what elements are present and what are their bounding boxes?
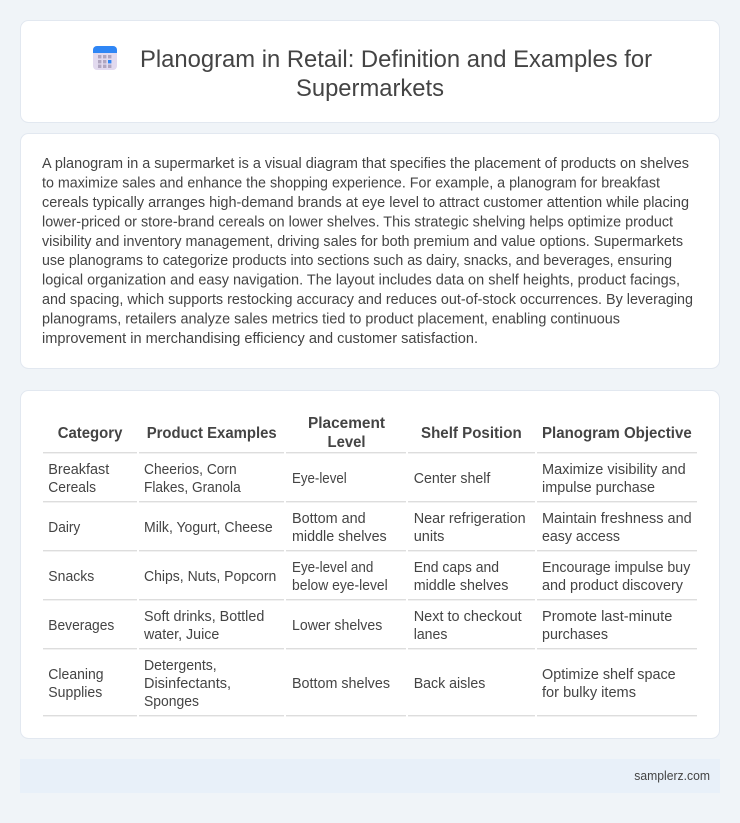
description paragraph: use planograms to categorize products into sections such as dairy, snacks, and beverages, ensuring xyxy=(42,253,672,269)
row: beverages: lanes xyxy=(414,627,447,643)
row: breakfast cereals: Flakes, Granola xyxy=(144,480,242,496)
row: breakfast cereals: impulse purchase xyxy=(542,480,655,496)
row: cleaning supplies xyxy=(48,658,676,710)
row: dairy: middle shelves xyxy=(292,529,387,545)
row: snacks: and product discovery xyxy=(542,578,684,594)
table header row: Level xyxy=(328,434,366,451)
row: snacks: below eye-level xyxy=(292,578,388,594)
table header row: Planogram Objective xyxy=(542,425,692,442)
row: cleaning supplies: Cleaning xyxy=(48,667,104,683)
description paragraph: A planogram in a supermarket is a visual diagram that specifies the placement of products on shelves xyxy=(42,156,689,172)
row: cleaning supplies: Sponges xyxy=(144,694,199,710)
row: dairy: Milk, Yogurt, Cheese xyxy=(144,520,273,536)
row: snacks: Snacks xyxy=(48,569,94,585)
row: beverages: Soft drinks, Bottled xyxy=(144,609,264,625)
row: cleaning supplies: Back aisles xyxy=(414,676,485,692)
row: beverages: purchases xyxy=(542,627,608,643)
row: beverages: water, Juice xyxy=(143,627,219,643)
description paragraph: cereals typically arranges high-demand brands at eye level to attract customer attention while placing xyxy=(42,195,689,211)
table header row: Shelf Position xyxy=(421,425,522,442)
row: snacks: middle shelves xyxy=(414,578,508,594)
panel: description xyxy=(20,134,720,368)
description paragraph: lower-priced or store-brand cereals on lower shelves. This strategic shelving helps optimize product xyxy=(42,214,673,230)
table header row xyxy=(58,415,692,451)
row: cleaning supplies: for bulky items xyxy=(542,685,636,701)
row: dairy: Near refrigeration xyxy=(414,511,526,527)
description paragraph xyxy=(42,156,693,347)
title: Supermarkets xyxy=(296,75,444,102)
row: dairy: Maintain freshness and xyxy=(542,511,692,527)
title xyxy=(140,46,652,102)
row: snacks: End caps and xyxy=(414,560,499,576)
description paragraph: planograms, retailers analyze sales metrics tied to product placement, enabling continuous xyxy=(42,312,620,328)
row: snacks: Encourage impulse buy xyxy=(542,560,691,576)
row: beverages xyxy=(48,609,672,643)
row: breakfast cereals xyxy=(48,462,686,496)
description paragraph: visibility and inventory management, driving sales for both premium and value options. Supermarkets xyxy=(42,234,683,250)
row: beverages: Promote last-minute xyxy=(542,609,672,625)
row: breakfast cereals: Maximize visibility and xyxy=(542,462,686,478)
row: beverages: Lower shelves xyxy=(292,618,382,634)
panel: title header xyxy=(20,20,720,122)
panel: planogram table xyxy=(20,390,720,738)
footer source text: samplerz.com xyxy=(634,769,710,783)
row: cleaning supplies: Supplies xyxy=(48,685,102,701)
description paragraph: logical organization and easy navigation. The layout includes data on shelf heights, product facings, xyxy=(42,273,680,289)
description paragraph: to maximize sales and enhance the shopping experience. For example, a planogram for breakfast xyxy=(42,175,660,191)
title: Planogram in Retail: Definition and Examples for xyxy=(140,46,652,73)
row: cleaning supplies: Disinfectants, xyxy=(144,676,231,692)
row: beverages: Beverages xyxy=(48,618,114,634)
row: dairy: easy access xyxy=(542,529,620,545)
row: breakfast cereals: Cheerios, Corn xyxy=(144,462,237,478)
row: dairy: Dairy xyxy=(48,520,81,536)
description paragraph: improvement in merchandising efficiency and customer satisfaction. xyxy=(42,331,478,347)
description paragraph: and spacing, which supports restocking accuracy and reduces out-of-stock occurrences. By leveraging xyxy=(42,292,693,308)
row: snacks xyxy=(48,560,691,594)
row: snacks: Chips, Nuts, Popcorn xyxy=(144,569,276,585)
row: dairy: units xyxy=(414,529,444,545)
row: breakfast cereals: Center shelf xyxy=(414,471,491,487)
icon: calendar grid xyxy=(93,46,117,70)
footer bar xyxy=(20,759,720,793)
row: dairy: Bottom and xyxy=(292,511,366,527)
row: beverages: Next to checkout xyxy=(414,609,522,625)
table header row: Placement xyxy=(308,415,386,432)
row: cleaning supplies: Bottom shelves xyxy=(292,676,390,692)
row: breakfast cereals: Cereals xyxy=(48,480,96,496)
row: breakfast cereals: Eye-level xyxy=(292,471,347,487)
table header row: Category xyxy=(58,425,122,442)
row: dairy xyxy=(48,511,692,545)
row: snacks: Eye-level and xyxy=(292,560,373,576)
row: cleaning supplies: Optimize shelf space xyxy=(542,667,676,683)
table header row: Product Examples xyxy=(147,425,277,442)
table row rules xyxy=(43,452,697,716)
row: breakfast cereals: Breakfast xyxy=(48,462,109,478)
row: cleaning supplies: Detergents, xyxy=(144,658,217,674)
